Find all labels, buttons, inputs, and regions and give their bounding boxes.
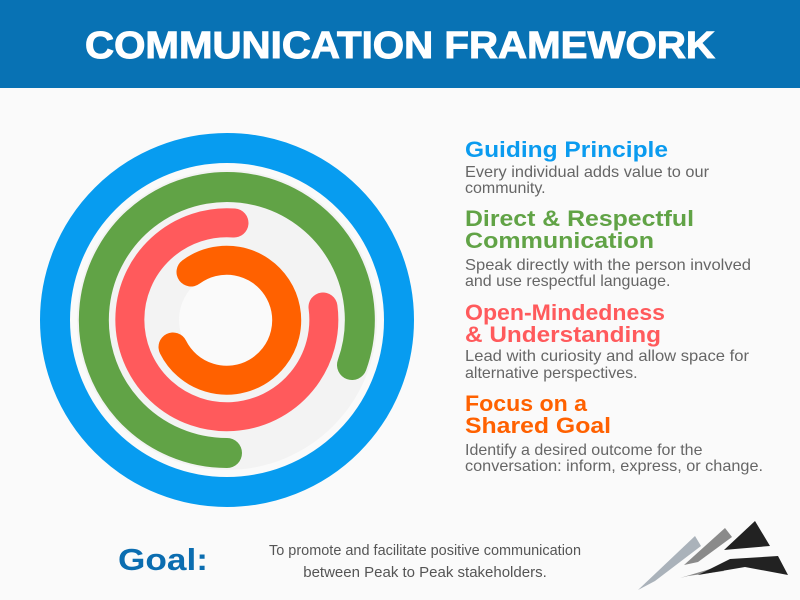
item: open-mindedness xyxy=(465,300,750,382)
blue ring xyxy=(55,148,399,492)
logo: mountains xyxy=(638,521,788,590)
item: direct & respectful: and use respectful language. xyxy=(465,273,670,290)
item: open-mindedness: & Understanding xyxy=(465,322,661,347)
item: direct & respectful xyxy=(465,206,751,290)
item: guiding principle: Guiding Principle xyxy=(465,137,668,162)
item: guiding principle: community. xyxy=(465,180,546,197)
green arc xyxy=(94,187,360,453)
item: direct & respectful: Speak directly with the person involved xyxy=(465,257,751,274)
item: shared goal: conversation: inform, express, or change. xyxy=(465,458,763,475)
item: shared goal: Identify a desired outcome for the xyxy=(465,442,703,459)
goal statement xyxy=(118,542,581,581)
item: shared goal: Shared Goal xyxy=(465,413,611,438)
item: open-mindedness: Lead with curiosity and allow space for xyxy=(465,348,750,365)
concentric arcs diagram xyxy=(55,148,399,492)
goal statement: Goal: xyxy=(118,542,208,577)
item: guiding principle xyxy=(465,137,710,197)
item: direct & respectful: Communication xyxy=(465,228,654,253)
item: direct & respectful: Direct & Respectful xyxy=(465,206,694,231)
item: open-mindedness: Open-Mindedness xyxy=(465,300,665,325)
item: shared goal: Focus on a xyxy=(465,391,588,416)
goal statement: To promote and facilitate positive communication xyxy=(269,542,581,559)
item: shared goal xyxy=(465,391,763,475)
header xyxy=(0,0,800,88)
goal statement: between Peak to Peak stakeholders. xyxy=(303,564,547,581)
title: COMMUNICATION FRAMEWORK xyxy=(85,25,716,67)
red arc xyxy=(130,223,324,417)
item: guiding principle: Every individual adds value to our xyxy=(465,164,710,181)
orange arc xyxy=(173,260,287,380)
item: open-mindedness: alternative perspectives. xyxy=(465,365,638,382)
